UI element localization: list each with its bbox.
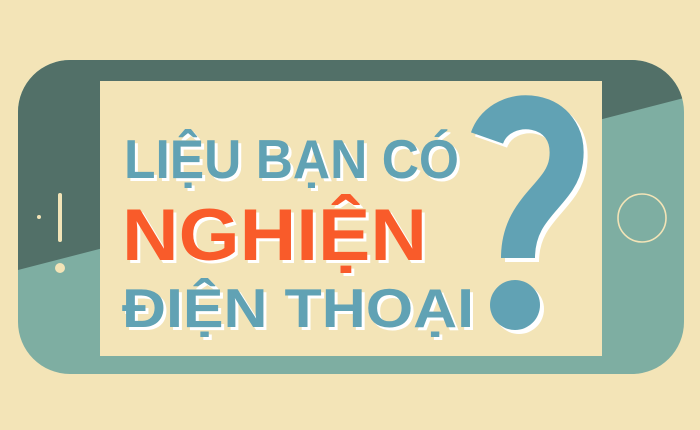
headline line 3: ĐIỆN THOẠI: [125, 280, 477, 342]
icon: home button: [618, 194, 666, 242]
headline line 1: LIỆU BẠN CÓ: [124, 128, 459, 190]
phone screen: [100, 81, 602, 356]
headline line 1: LIỆU BẠN CÓ: [127, 131, 462, 193]
phone body: [18, 60, 684, 374]
headline line 3: ĐIỆN THOẠI: [122, 277, 474, 339]
infographic: [18, 60, 684, 374]
icon: question mark: [487, 112, 571, 334]
headline line 2: NGHIỆN: [122, 195, 427, 276]
headline line 2: NGHIỆN: [125, 198, 430, 279]
icon: speaker slot: [58, 193, 62, 242]
icon: sensor dot: [37, 215, 41, 219]
icon: camera: [55, 263, 65, 273]
